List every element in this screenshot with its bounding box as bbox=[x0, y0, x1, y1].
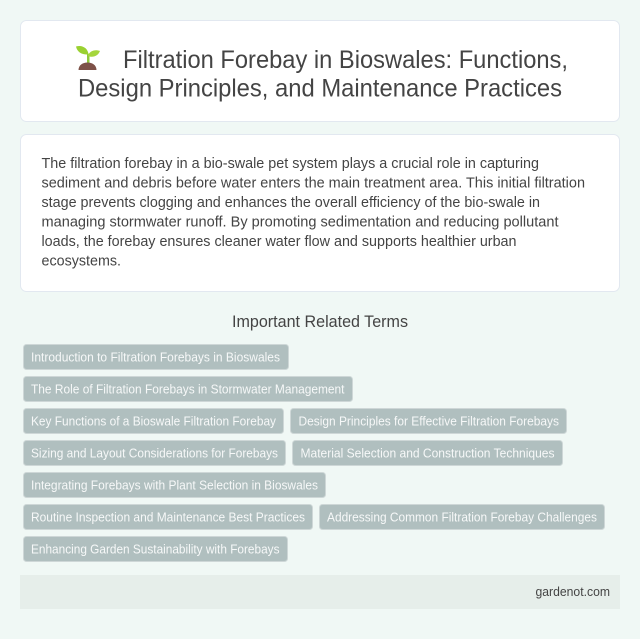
panel: description bbox=[20, 134, 620, 292]
tag: Material Selection and Construction Techniques bbox=[300, 446, 554, 460]
description text bbox=[42, 155, 585, 270]
tag: Integrating Forebays with Plant Selection in Bioswales bbox=[31, 478, 318, 492]
tag bbox=[24, 440, 286, 466]
tag bbox=[24, 376, 352, 402]
related terms tags bbox=[24, 344, 604, 562]
title: Filtration Forebay in Bioswales: Functions, bbox=[123, 46, 568, 74]
footer bbox=[20, 575, 620, 609]
description text: ecosystems. bbox=[42, 252, 121, 270]
tag bbox=[292, 440, 562, 466]
tag bbox=[24, 408, 284, 434]
panel: title card bbox=[20, 20, 620, 122]
tag bbox=[24, 536, 288, 562]
tag bbox=[24, 504, 312, 530]
tag bbox=[320, 504, 604, 530]
tag: Key Functions of a Bioswale Filtration Forebay bbox=[31, 414, 277, 428]
description text: loads, the forebay ensures cleaner water flow and supports healthier urban bbox=[42, 233, 516, 250]
description text: managing stormwater runoff. By promoting sedimentation and reducing pollutant bbox=[42, 214, 559, 230]
tag bbox=[24, 472, 326, 498]
tag: Sizing and Layout Considerations for Forebays bbox=[31, 446, 278, 460]
heading: important related terms: Important Related Terms bbox=[232, 313, 408, 331]
tag: Routine Inspection and Maintenance Best Practices bbox=[31, 510, 305, 524]
tag: Design Principles for Effective Filtration Forebays bbox=[298, 414, 559, 428]
tag: Introduction to Filtration Forebays in Bioswales bbox=[31, 350, 280, 364]
tag: Enhancing Garden Sustainability with Forebays bbox=[31, 542, 280, 556]
title bbox=[78, 46, 568, 102]
description text: The filtration forebay in a bio-swale pet system plays a crucial role in capturing bbox=[42, 155, 539, 172]
title: Design Principles, and Maintenance Practices bbox=[78, 74, 562, 102]
tag: Addressing Common Filtration Forebay Challenges bbox=[327, 510, 597, 524]
tag bbox=[24, 344, 288, 370]
tag bbox=[290, 408, 566, 434]
footer source: gardenot.com bbox=[536, 584, 610, 599]
tag: The Role of Filtration Forebays in Stormwater Management bbox=[31, 382, 345, 396]
description text: stage prevents clogging and enhances the overall efficiency of the bio-swale in bbox=[42, 194, 540, 211]
description text: sediment and debris before water enters the main treatment area. This initial filtration bbox=[42, 174, 585, 192]
icon: seedling bbox=[76, 46, 100, 70]
